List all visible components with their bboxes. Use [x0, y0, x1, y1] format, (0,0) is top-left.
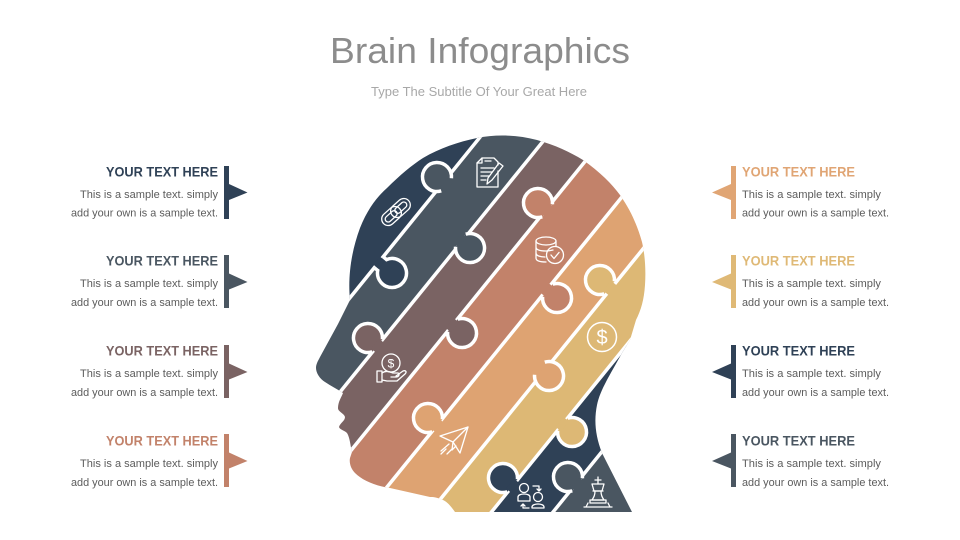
right item 4	[712, 432, 889, 489]
tab: slate into mauve	[454, 232, 486, 264]
right item 3	[712, 342, 889, 399]
body text: add your own is a sample text.	[71, 387, 218, 399]
heading: YOUR TEXT HERE	[742, 432, 855, 448]
body text: add your own is a sample text.	[71, 477, 218, 489]
heading: YOUR TEXT HERE	[742, 342, 855, 358]
body text	[742, 278, 889, 309]
band: navy lower	[494, 344, 628, 512]
tab: mauve into slate	[352, 322, 384, 354]
heading: YOUR TEXT HERE	[742, 164, 855, 180]
body text: This is a sample text. simply	[742, 368, 881, 380]
heading: YOUR TEXT HERE	[742, 252, 855, 268]
band: slate lower	[555, 452, 632, 512]
tab: terracotta into peach	[540, 282, 574, 314]
tab: peach into terracotta	[412, 402, 444, 434]
body text: add your own is a sample text.	[71, 208, 218, 220]
body text: add your own is a sample text.	[742, 208, 889, 220]
band: mauve	[338, 142, 585, 450]
head bands	[310, 130, 650, 520]
flag	[224, 166, 248, 219]
tab: terracotta into mauve	[522, 186, 554, 220]
flag	[224, 255, 248, 308]
flag	[712, 345, 736, 398]
flag	[224, 434, 248, 487]
body text: add your own is a sample text.	[742, 297, 889, 309]
body text	[742, 368, 889, 399]
icon: chess king	[584, 477, 612, 507]
icon: dollar coin	[588, 322, 616, 352]
body text: add your own is a sample text.	[742, 477, 889, 489]
subtitle: Type The Subtitle Of Your Great Here	[371, 84, 587, 99]
left item 4	[71, 432, 248, 489]
body text	[71, 278, 218, 309]
band: peach	[387, 198, 644, 499]
right item 2	[712, 252, 889, 309]
body text: This is a sample text. simply	[742, 189, 881, 201]
heading: YOUR TEXT HERE	[106, 432, 218, 448]
flag	[712, 255, 736, 308]
body text: This is a sample text. simply	[80, 278, 218, 290]
flag	[712, 434, 736, 487]
body text	[742, 458, 889, 489]
heading: YOUR TEXT HERE	[106, 164, 218, 180]
title: Brain Infographics	[330, 30, 630, 71]
body text	[71, 368, 218, 399]
flag	[712, 166, 736, 219]
icon: database with check	[536, 237, 564, 264]
icon: document and pen	[477, 158, 503, 187]
right item 1	[712, 164, 889, 220]
left item 3	[71, 342, 248, 399]
body text: add your own is a sample text.	[71, 297, 218, 309]
tab: navy into slate	[374, 256, 408, 290]
tab: slate into navy	[420, 160, 454, 194]
tab: sand into peach	[584, 264, 616, 296]
body text: add your own is a sample text.	[742, 387, 889, 399]
body text: This is a sample text. simply	[80, 189, 218, 201]
icon: hand holding coin	[377, 354, 406, 382]
left item 1	[71, 164, 248, 220]
tab: mauve into terracotta	[446, 316, 478, 350]
body text	[71, 458, 218, 489]
icon: paper plane	[440, 427, 468, 454]
body text: This is a sample text. simply	[80, 458, 218, 470]
tab: sand into navy	[556, 416, 588, 448]
band: slate	[316, 136, 543, 392]
body text	[71, 189, 218, 220]
left item 2	[71, 252, 248, 309]
heading: YOUR TEXT HERE	[106, 252, 218, 268]
band: terracotta	[350, 162, 622, 488]
icon: people exchange	[518, 484, 544, 508]
heading: YOUR TEXT HERE	[106, 342, 218, 358]
icon: hand holding coin: $	[388, 356, 395, 370]
head puzzle infographic	[310, 130, 650, 520]
tab: slate into navy lower	[552, 460, 584, 494]
body text	[742, 189, 889, 220]
body text: This is a sample text. simply	[742, 458, 881, 470]
tab: peach into sand	[532, 360, 566, 392]
body text: This is a sample text. simply	[80, 368, 218, 380]
icon: dollar coin: $	[596, 327, 608, 349]
band: navy	[349, 138, 480, 298]
icon: chain link	[379, 196, 413, 228]
tab: navy into sand	[486, 462, 519, 494]
band: sand	[440, 248, 646, 512]
body text: This is a sample text. simply	[742, 278, 881, 290]
flag	[224, 345, 248, 398]
